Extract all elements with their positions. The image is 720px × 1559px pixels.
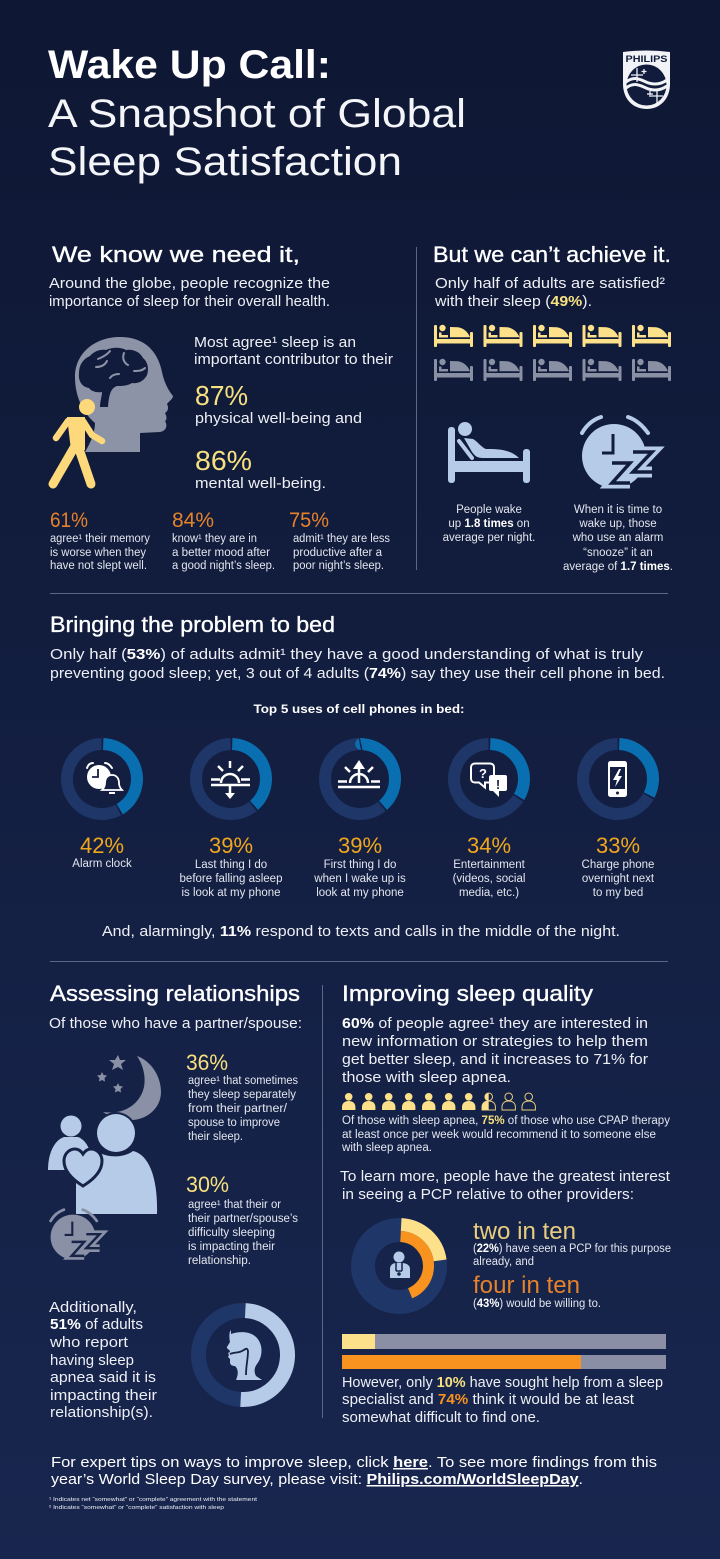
text block: CPAP therapy: with sleep apnea. [341, 1142, 432, 1154]
text block: intro right [434, 275, 665, 310]
text: snooze: When it is time to [574, 504, 662, 516]
chart heading: Top 5 uses of cell phones in bed: [254, 702, 464, 716]
chart: donut 51% sleep apnea [196, 1308, 290, 1402]
text block: additionally 51%: Additionally, [49, 1299, 137, 1316]
title [48, 43, 466, 184]
heading: but we can't achieve it: But we can’t achieve it. [433, 242, 671, 267]
chart: 10% specialist bar [342, 1334, 666, 1349]
text: people wake [443, 504, 535, 544]
panel: donut charge phone 33% [570, 731, 666, 899]
stat: 61% memory [50, 509, 150, 572]
panel: donut last thing 39%: before falling asleep [180, 873, 282, 885]
stat: 36% sleep separately: 36% [186, 1050, 228, 1075]
icon row: people 75% [342, 1093, 535, 1110]
text block: however: However, only 10% have sought help from a sleep [342, 1374, 663, 1391]
text block: intro left: importance of sleep for their overall health. [49, 293, 330, 310]
stat: 61% memory: agree¹ their memory [50, 533, 150, 545]
text block: intro right: Only half of adults are satisfied² [435, 275, 665, 292]
stat: 36% sleep separately: spouse to improve [188, 1117, 280, 1129]
panel: donut last thing 39%: 39% [209, 833, 253, 858]
stat: 61% memory: 61% [50, 509, 88, 532]
text block: bringing the problem: Only half ( 53%) of adults admit¹ they have a good understanding of what is truly [50, 646, 644, 663]
panel: donut charge phone 33%: Charge phone [582, 859, 654, 871]
text block: additionally 51%: apnea said it is [50, 1369, 156, 1386]
panel: donut first thing 39%: 39% [338, 833, 382, 858]
stat: 36% sleep separately: agree¹ that sometimes [188, 1075, 298, 1087]
stat: 30% relationship: agree¹ that their or [188, 1199, 281, 1211]
text block: intro left: Around the globe, people recognize the [49, 275, 330, 292]
text block: CPAP therapy [341, 1115, 670, 1154]
text: snooze: “snooze” it an [583, 547, 653, 559]
text block: most agree [194, 334, 393, 368]
text block: additionally 51% [49, 1299, 157, 1421]
panel: donut charge phone 33%: 33% [596, 833, 640, 858]
panel: donut last thing 39%: is look at my phone [181, 887, 281, 899]
panel: donut first thing 39%: First thing I do [324, 859, 396, 871]
panel: donut alarm clock 42%: 42% [80, 833, 124, 858]
icon: person in bed [448, 422, 530, 483]
stat: 86% mental: 86% [195, 445, 252, 476]
icon: chat bubbles: ! [496, 777, 500, 792]
icon: head with airway [227, 1330, 262, 1380]
text block: additionally 51%: impacting their [50, 1387, 157, 1404]
stat: 75% productive: productive after a [293, 547, 383, 559]
stat: two in ten: already, and [473, 1256, 534, 1268]
text: people wake: average per night. [443, 532, 535, 544]
text: people wake: People wake [456, 504, 522, 516]
text block: bringing the problem: preventing good sleep; yet, 3 out of 4 adults ( 74%) say they use their cell phone in bed. [50, 665, 665, 682]
heading: we know we need it: We know we need it, [52, 242, 300, 267]
text block: however [342, 1374, 663, 1426]
panel: donut first thing 39%: look at my phone [316, 887, 404, 899]
stat: four in ten: (43%) would be willing to. [473, 1298, 601, 1310]
panel: donut entertainment 34%: 34% [467, 833, 511, 858]
icon row: beds 49% satisfied [434, 325, 671, 381]
icon: chat bubbles: ? [479, 766, 487, 781]
text block: additionally 51%: relationship(s). [50, 1404, 153, 1421]
footer call to action [51, 1454, 657, 1488]
stat: 75% productive: admit¹ they are less [293, 533, 390, 545]
text block: to learn more [340, 1168, 671, 1203]
panel: donut last thing 39% [180, 730, 282, 899]
stat: four in ten [473, 1272, 601, 1310]
heading: improving sleep quality: Improving sleep quality [342, 981, 593, 1006]
footnotes: ² Indicates “somewhat” or “complete” satisfaction with sleep [49, 1505, 224, 1511]
icon: moon and stars [97, 1055, 161, 1120]
text: of those who have a partner: Of those who have a partner/spouse: [49, 1015, 302, 1032]
stat: 36% sleep separately: their sleep. [188, 1131, 243, 1143]
panel: donut entertainment 34% [440, 730, 538, 899]
stat: four in ten: four in ten [473, 1272, 580, 1299]
stat: 61% memory: have not slept well. [50, 560, 147, 572]
heading: bringing the problem to bed: Bringing the problem to bed [50, 612, 335, 637]
panel: donut charge phone 33%: overnight next [582, 873, 655, 885]
stat: 30% relationship: 30% [186, 1172, 229, 1197]
text block: 60% of people: get better sleep, and it increases to 71% for [342, 1051, 648, 1068]
chart: 74% difficult bar [342, 1355, 666, 1369]
text block: intro right: with their sleep ( 49%). [434, 293, 592, 310]
text block: additionally 51%: having sleep [50, 1352, 134, 1369]
stat: two in ten: two in ten [473, 1218, 576, 1245]
icon: head with brain and walking person [53, 337, 173, 484]
text: snooze: wake up, those [578, 518, 657, 530]
icon: phone charging [608, 761, 627, 797]
stat: 84% mood [172, 509, 275, 572]
panel: donut entertainment 34%: Entertainment [453, 859, 526, 871]
icon: grey snooze clock [51, 1210, 100, 1259]
stat: 87% physical: 87% [195, 380, 248, 411]
stat: 30% relationship: their partner/spouse’s [188, 1213, 298, 1225]
stat: 84% mood: a better mood after [172, 547, 270, 559]
icon: doctor [390, 1252, 410, 1278]
text: people wake: up 1.8 times on [448, 518, 530, 530]
panel: donut last thing 39%: Last thing I do [195, 859, 267, 871]
text block: most agree: Most agree¹ sleep is an [194, 334, 356, 351]
text: snooze [563, 504, 673, 573]
text block: 60% of people: 60% of people agree¹ they are interested in [342, 1015, 648, 1032]
text block: to learn more: To learn more, people have the greatest interest [340, 1168, 671, 1185]
panel: donut entertainment 34%: (videos, social [453, 873, 525, 885]
panel: donut charge phone 33%: to my bed [593, 887, 643, 899]
text: alarmingly 11%: And, alarmingly, 11% respond to texts and calls in the middle of the night. [102, 923, 620, 940]
footer call to action: year’s World Sleep Day survey, please visit: Philips.com/WorldSleepDay . [51, 1471, 583, 1488]
stat: two in ten [473, 1218, 671, 1268]
stat: 30% relationship: relationship. [188, 1255, 251, 1267]
text block: additionally 51%: who report [49, 1334, 129, 1351]
text block: to learn more: in seeing a PCP relative to other providers: [342, 1186, 634, 1203]
text block: 60% of people: new information or strategies to help them [342, 1033, 648, 1050]
stat: 75% productive [289, 509, 390, 572]
panel: donut alarm clock 42%: Alarm clock [72, 858, 132, 870]
title: Wake Up Call: [48, 43, 331, 87]
footnotes [49, 1497, 258, 1511]
stat: 75% productive: poor night’s sleep. [293, 560, 384, 572]
text block: however: specialist and 74% think it would be at least [342, 1391, 635, 1408]
text block: additionally 51%: 51% of adults [50, 1316, 143, 1333]
text block: however: somewhat difficult to find one. [342, 1409, 540, 1426]
icon: couple, moon, stars and clock [48, 1055, 161, 1259]
icon: sunrise with up arrow [338, 760, 380, 787]
stat: 84% mood: know¹ they are in [172, 533, 257, 545]
stat: 36% sleep separately: from their partner/ [188, 1103, 288, 1115]
title: A Snapshot of Global [48, 92, 466, 136]
text: snooze: who use an alarm [572, 532, 663, 544]
text block: bringing the problem [50, 646, 665, 682]
heading: assessing relationships: Assessing relationships [50, 981, 300, 1006]
panel: donut alarm clock 42% [55, 732, 149, 870]
text block: 60% of people: those with sleep apnea. [342, 1069, 511, 1086]
footer call to action: For expert tips on ways to improve sleep, click here. To see more findings from this [51, 1454, 657, 1471]
icon: chat bubbles [471, 764, 507, 797]
panel: donut first thing 39% [311, 730, 409, 899]
panel: donut entertainment 34%: media, etc.) [459, 887, 519, 899]
stat: 84% mood: 84% [172, 509, 214, 532]
icon: alarm clock and bell [87, 763, 122, 793]
stat: 30% relationship: is impacting their [188, 1241, 275, 1253]
icon: sunset with down arrow [211, 761, 250, 799]
stat: 61% memory: is worse when they [50, 547, 146, 559]
chart: PCP donut [355, 1222, 443, 1310]
stat: 84% mood: a good night’s sleep. [172, 560, 275, 572]
title: Sleep Satisfaction [48, 140, 402, 184]
footnotes: ¹ Indicates net “somewhat” or “complete” agreement with the statement [49, 1497, 258, 1503]
stat: 75% productive: 75% [289, 509, 329, 532]
stat: 36% sleep separately [186, 1050, 298, 1143]
panel: donut first thing 39%: when I wake up is [313, 873, 406, 885]
icon: Philips shield logo [623, 50, 670, 109]
stat: two in ten: (22%) have seen a PCP for this purpose [473, 1243, 671, 1255]
icon: Philips shield logo: PHILIPS [626, 54, 668, 65]
text block: most agree: important contributor to their [194, 351, 393, 368]
text block: intro left [49, 275, 330, 310]
stat: 30% relationship [186, 1172, 298, 1267]
stat: 87% physical [195, 380, 362, 427]
stat: 87% physical: physical well-being and [195, 410, 362, 427]
text: snooze: average of 1.7 times. [563, 561, 673, 573]
stat: 86% mental [195, 445, 326, 492]
text block: CPAP therapy: at least once per week would recommend it to someone else [342, 1129, 656, 1141]
stat: 36% sleep separately: they sleep separately [188, 1089, 296, 1101]
text block: CPAP therapy: Of those with sleep apnea, 75% of those who use CPAP therapy [342, 1115, 670, 1127]
stat: 30% relationship: difficulty sleeping [188, 1227, 275, 1239]
icon: alarm clock snooze [582, 417, 652, 488]
text block: 60% of people [342, 1015, 648, 1086]
icon: partners with heart [48, 1112, 157, 1214]
stat: 86% mental: mental well-being. [195, 475, 326, 492]
